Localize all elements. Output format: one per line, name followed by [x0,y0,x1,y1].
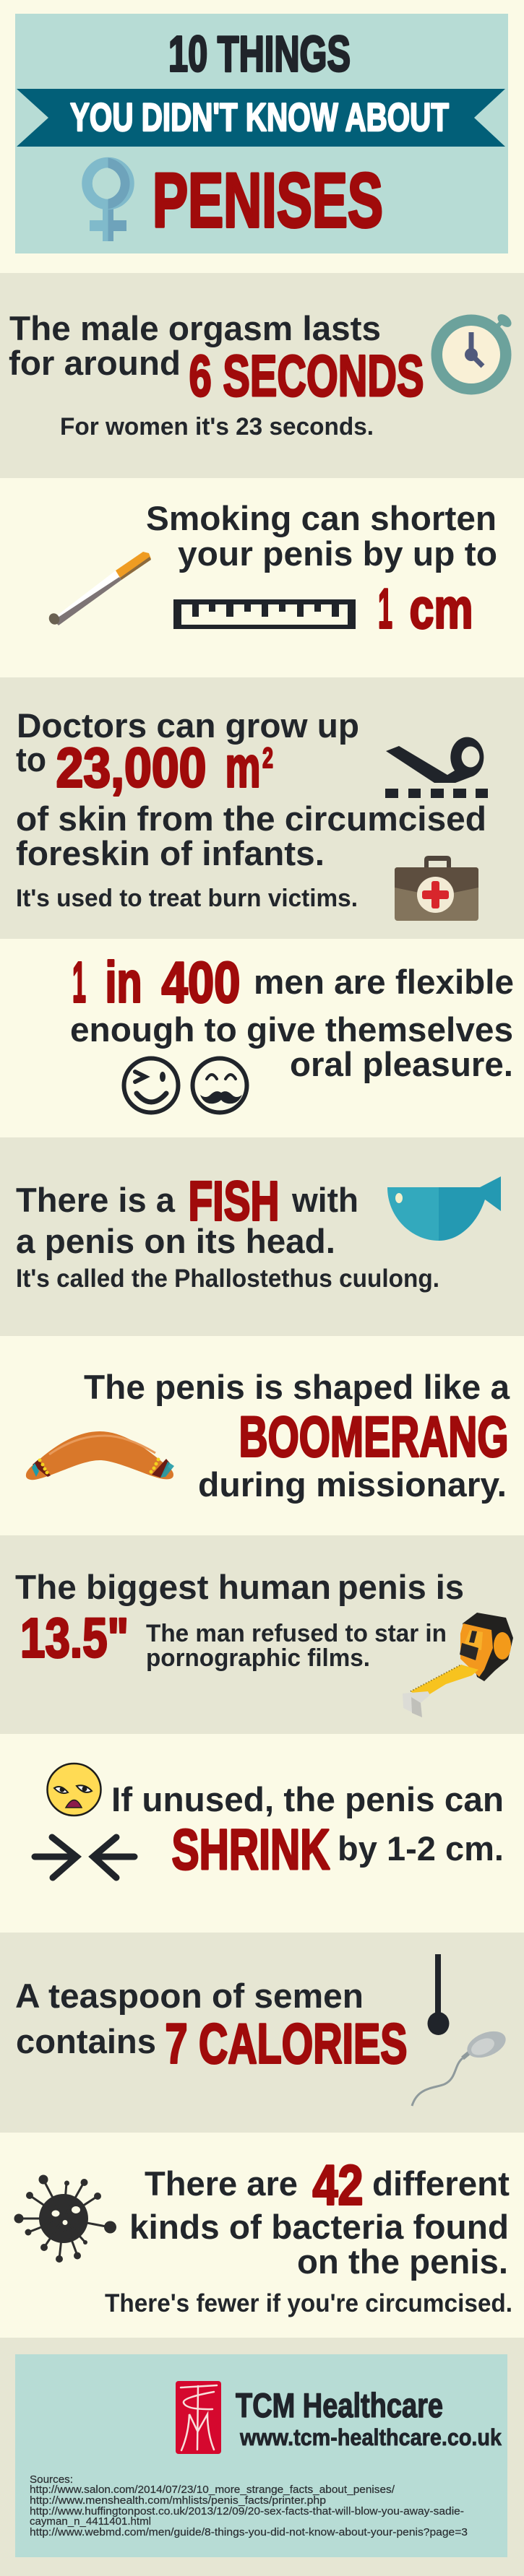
text: fact 5: FISH [188,1170,279,1232]
text: fact 3: m [226,735,260,799]
text: fact 4: enough to give themselves [70,1010,513,1049]
icon: ruler [173,599,356,629]
text: fact 2 [146,499,497,640]
text: fact 4: men are flexible [254,963,514,1001]
text: fact 3: It's used to treat burn victims. [16,885,358,912]
text: fact 3: of skin from the circumcised [16,799,486,838]
text: fact 2: cm [409,576,473,640]
panel: fact 8 shrink [0,1734,524,1933]
text: fact 9: contains [16,2022,156,2060]
text: fact 7: 13.5" [20,1608,129,1670]
footer card [15,2354,507,2557]
text: fact 7 [15,1568,464,1672]
text: fact 5: It's called the Phallostethus cuulong. [16,1265,439,1293]
text: fact 7: The man refused to star in [146,1620,447,1647]
panel: fact 4 flexible [0,939,524,1137]
text: fact 4: 1 [72,950,86,1014]
panel: fact 10 bacteria [0,2133,524,2338]
text: fact 7: pornographic films. [146,1644,370,1672]
icon: cigarette [47,552,151,626]
text: sources: http://www.webmd.com/men/guide/8-things-you-did-not-know-about-your-penis?page=3 [30,2526,468,2538]
icon: winking smiley [124,1059,178,1112]
text: fact 3: 23,000 [56,737,207,799]
icon: bacteria [14,2175,116,2263]
text: fact 3: to [16,740,46,779]
text: fact 6: during missionary. [198,1465,507,1504]
icon: moustache smiley [192,1059,247,1112]
text: fact 1: 6 SECONDS [189,344,424,409]
panel: footer [0,2338,524,2576]
text: fact 10: on the penis. [297,2242,508,2281]
icon: boomerang [26,1431,174,1480]
text: website: www.tcm-healthcare.co.uk [239,2424,502,2450]
text: fact 3: Doctors can grow up [17,706,359,745]
panel: fact 3 doctors [0,677,524,939]
panel: fact 7 biggest [0,1535,524,1734]
text: fact 3 [16,706,486,912]
text: fact 5 [16,1170,439,1293]
icon: converging arrows [35,1837,134,1878]
text: fact 4: oral pleasure. [290,1045,513,1083]
text: fact 2: your penis by up to [178,534,497,573]
text: fact 1: For women it's 23 seconds. [60,413,374,441]
text: fact 10 [105,2154,512,2317]
panel: fact 1 orgasm [0,273,524,478]
text: fact 4 [70,950,514,1083]
text: fact 4: 400 [162,950,240,1014]
icon: first aid kit [395,856,478,921]
text: sources: http://www.menshealth.com/mhlists/penis_facts/printer.php [30,2494,326,2507]
text: sources: http://www.huffingtonpost.co.uk/2013/12/09/20-sex-facts-that-will-blow-you-away-sadie- [30,2505,464,2518]
ribbon banner [17,89,505,147]
text: sources: Sources: [30,2473,73,2486]
text: fact 8 [111,1780,504,1881]
panel: fact 2 smoking [0,478,524,677]
text: fact 10: kinds of bacteria found [129,2208,509,2246]
text: fact 3: 2 [262,742,273,774]
panel: fact 5 fish [0,1137,524,1336]
text: fact 8: by 1-2 cm. [338,1829,504,1868]
text: fact 10: There's fewer if you're circumcised. [105,2289,512,2317]
text: sources: cayman_n_4411401.html [30,2515,151,2528]
icon: stopwatch [431,312,514,394]
text: fact 9 [15,1977,408,2076]
icon: scissors [385,737,488,798]
text: fact 8: If unused, the penis can [111,1780,504,1818]
text: fact 1: for around [9,344,181,382]
icon: fish [387,1176,501,1241]
text: sources [30,2473,468,2538]
text: fact 7: penis is [338,1568,464,1606]
text: fact 2: Smoking can shorten [146,499,497,537]
icon: female symbol [87,157,130,241]
text: fact 5: a penis on its head. [16,1222,335,1260]
text: fact 5: with [291,1181,358,1219]
text: fact 10: 42 [312,2154,363,2217]
icon: spoon [428,1954,450,2035]
text: sources: http://www.salon.com/2014/07/23/10_more_strange_facts_about_penises/ [30,2484,395,2496]
text: fact 6 [84,1368,510,1504]
text: fact 4: in [106,950,142,1014]
icon: tape measure [403,1613,513,1717]
text: fact 8: SHRINK [172,1817,330,1881]
panel: fact 9 calories [0,1933,524,2133]
panel: title [15,14,508,253]
panel: fact 6 boomerang [0,1336,524,1535]
heading: 10 things: 10 THINGS [168,26,351,82]
icon: sperm [412,2026,510,2106]
text: fact 9: 7 CALORIES [165,2012,408,2076]
text: fact 2: 1 [378,576,392,640]
text: fact 5: There is a [16,1181,176,1219]
icon: sad face [48,1764,101,1816]
heading: penises: PENISES [153,157,383,243]
text: fact 10: There are [145,2164,298,2203]
text: fact 3: foreskin of infants. [16,834,325,872]
logo: TCM mark [176,2381,221,2454]
text: fact 9: A teaspoon of semen [15,1977,364,2015]
text: fact 1 [9,309,424,441]
text: fact 10: different [372,2164,510,2203]
text: company name: TCM Healthcare [236,2386,443,2424]
text: fact 1: The male orgasm lasts [9,309,381,347]
text: fact 7: The biggest human [15,1568,331,1606]
text: fact 6: The penis is shaped like a [84,1368,510,1406]
